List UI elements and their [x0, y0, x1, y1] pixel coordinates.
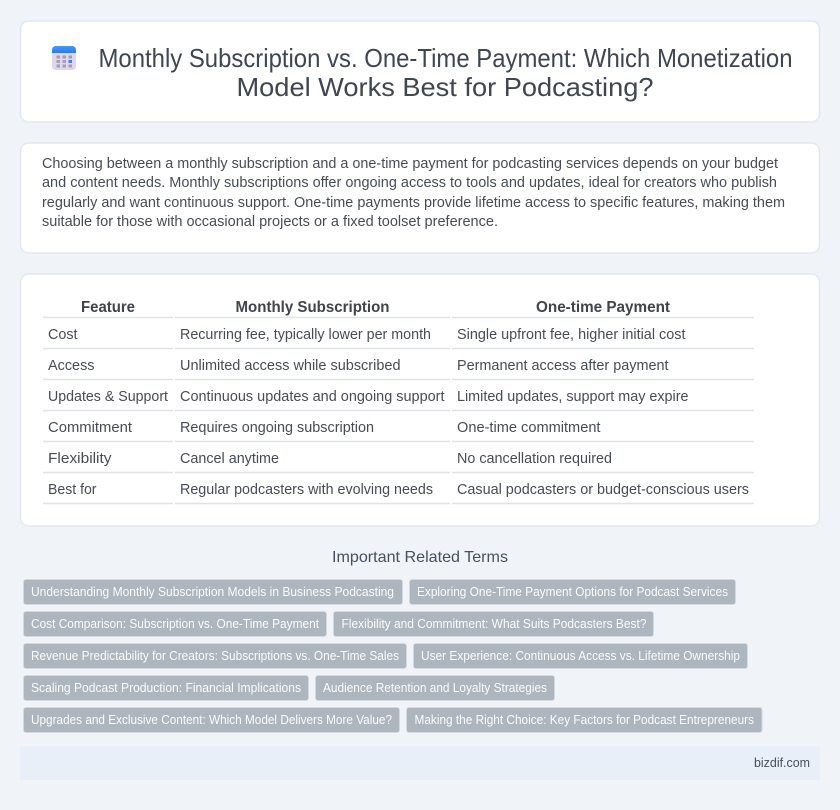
row: cost: Recurring fee, typically lower per month — [180, 326, 431, 343]
footer — [20, 746, 820, 780]
tag: User Experience: Continuous Access vs. Lifetime Ownership — [421, 649, 740, 663]
tag: Cost Comparison: Subscription vs. One-Time Payment — [31, 617, 319, 631]
row: best for: Regular podcasters with evolving needs — [180, 481, 433, 498]
table header: Feature — [81, 299, 135, 316]
row: flexibility: Cancel anytime — [180, 450, 279, 467]
row: access: Access — [48, 357, 94, 374]
row: best for: Best for — [48, 481, 97, 498]
row: updates and support — [48, 388, 688, 405]
row: best for: Casual podcasters or budget-conscious users — [457, 481, 749, 498]
row: access: Unlimited access while subscribed — [180, 357, 400, 374]
related terms tags — [24, 580, 762, 732]
row: updates and support: Limited updates, support may expire — [457, 388, 688, 405]
tag — [24, 580, 402, 604]
row: commitment: Commitment — [48, 419, 133, 436]
icon: calendar — [52, 46, 76, 70]
text block: introduction: and content needs. Monthly subscriptions offer ongoing access to tools and updates, ideal for creators who publish — [42, 174, 777, 191]
row: updates and support: Updates & Support — [48, 388, 169, 405]
heading: related terms: Important Related Terms — [332, 549, 508, 566]
tag: Flexibility and Commitment: What Suits Podcasters Best? — [342, 617, 647, 631]
row: commitment: One-time commitment — [457, 419, 601, 436]
tag — [414, 644, 748, 668]
row: flexibility: Flexibility — [48, 450, 112, 467]
row: cost: Cost — [48, 326, 78, 343]
footer: bizdif.com — [754, 756, 810, 770]
tag — [24, 708, 400, 732]
title: Model Works Best for Podcasting? — [236, 72, 654, 102]
panel: comparison table — [20, 274, 820, 526]
row: flexibility: No cancellation required — [457, 450, 612, 467]
tag: Understanding Monthly Subscription Models in Business Podcasting — [31, 585, 394, 599]
row: commitment: Requires ongoing subscription — [180, 419, 374, 436]
tag: Upgrades and Exclusive Content: Which Model Delivers More Value? — [31, 713, 392, 727]
tag — [24, 676, 308, 700]
row: access — [48, 357, 669, 374]
text block: introduction: regularly and want continuous support. One-time payments provide lifetime access to specific features, making them — [42, 194, 785, 211]
table header: One-time Payment — [536, 299, 671, 316]
title: Monthly Subscription vs. One-Time Payment: Which Monetization — [98, 43, 792, 73]
tag — [406, 708, 762, 732]
panel: header — [20, 21, 820, 122]
row: commitment — [48, 419, 601, 436]
title — [98, 43, 792, 102]
row: best for — [48, 481, 749, 498]
row: cost: Single upfront fee, higher initial cost — [457, 326, 686, 343]
row: cost — [48, 326, 686, 343]
tag — [410, 580, 736, 604]
row: updates and support: Continuous updates and ongoing support — [180, 388, 445, 405]
table header: Monthly Subscription — [236, 299, 390, 316]
tag: Exploring One-Time Payment Options for Podcast Services — [417, 585, 728, 599]
text block: introduction: suitable for those with occasional projects or a fixed toolset preference. — [42, 213, 498, 230]
panel: introduction — [20, 143, 820, 253]
tag — [24, 612, 326, 636]
tag: Scaling Podcast Production: Financial Implications — [31, 681, 301, 695]
table header — [81, 299, 671, 316]
tag: Making the Right Choice: Key Factors for Podcast Entrepreneurs — [414, 713, 754, 727]
text block: introduction — [42, 155, 785, 230]
row: access: Permanent access after payment — [457, 357, 669, 374]
tag — [316, 676, 554, 700]
tag: Audience Retention and Loyalty Strategies — [323, 681, 547, 695]
text block: introduction: Choosing between a monthly subscription and a one-time payment for podcasting services depends on your budget — [42, 155, 779, 172]
tag — [24, 644, 406, 668]
tag: Revenue Predictability for Creators: Subscriptions vs. One-Time Sales — [31, 649, 399, 663]
row: flexibility — [48, 450, 612, 467]
tag — [334, 612, 654, 636]
